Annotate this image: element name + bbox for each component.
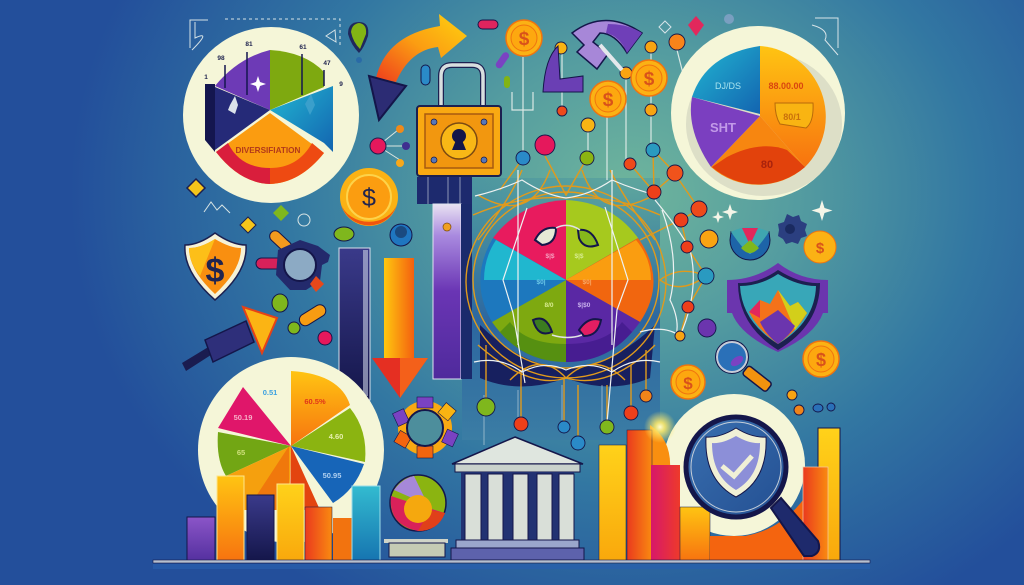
small gear — [778, 214, 807, 244]
icons right of web: $ — [816, 240, 825, 257]
cream circle behind large magnifier — [663, 394, 805, 536]
leaves — [535, 228, 556, 245]
center panel behind web — [462, 178, 660, 445]
panel: central pie in web — [480, 200, 654, 362]
green wedge — [270, 50, 324, 110]
panel: top left diversification pie — [183, 27, 359, 203]
gauge — [730, 232, 770, 260]
pie labels: $|$ — [545, 253, 555, 260]
icon: green pin — [348, 22, 368, 63]
panel: top left diversification pie: 81 — [245, 41, 253, 48]
icon: shield with mountains — [727, 263, 828, 352]
icon: globe pie on base — [384, 475, 448, 557]
baseline — [153, 560, 870, 569]
panel: top left diversification pie: 98 — [217, 55, 225, 62]
icon: coins right: $ — [816, 350, 826, 370]
navy wedge — [215, 87, 270, 150]
icon: gear — [393, 397, 458, 458]
blue wedge — [270, 86, 333, 152]
arrow: curved orange — [369, 14, 467, 120]
panel: top right pie — [671, 26, 845, 200]
bar: navy tall — [339, 248, 370, 400]
icon: coins top center — [506, 20, 667, 117]
icon: large magnifier with shield — [686, 417, 819, 556]
bar chart left — [187, 476, 380, 561]
panel: top left diversification pie: 47 — [323, 60, 331, 67]
panel: bottom left pie: 65 — [237, 448, 245, 457]
icon: coins top center: $ — [603, 90, 614, 111]
icon: gear with lens — [256, 224, 412, 345]
panel: bottom left pie: 0.51 — [263, 388, 277, 397]
icon: coins top center: $ — [644, 69, 655, 90]
web network — [466, 150, 706, 443]
icon: padlock — [417, 65, 501, 176]
icons right of web — [712, 200, 836, 263]
pie labels: $0| — [582, 279, 592, 286]
small network nodes — [378, 130, 406, 160]
icon: purple hammer — [543, 20, 642, 92]
pie segments — [480, 200, 654, 362]
arrow: down red orange — [372, 258, 428, 398]
panel: top right pie: SHT — [710, 120, 736, 135]
purple pillar — [417, 177, 472, 379]
pie labels: $|$0 — [578, 302, 591, 309]
bar chart right — [599, 411, 840, 561]
icon: coins right: $ — [683, 374, 693, 393]
icon: small magnifier — [716, 340, 772, 392]
icon: coins right — [671, 341, 839, 399]
panel: top right pie: 80/1 — [783, 112, 801, 122]
orange diversification wedge — [216, 113, 324, 184]
panel: bottom left pie: 50.95 — [323, 471, 341, 480]
capsules — [421, 20, 510, 88]
network nodes and stems — [512, 47, 705, 180]
frame corners top left — [190, 19, 340, 50]
pie labels: $0| — [536, 279, 546, 286]
pie labels: 8/0 — [544, 302, 554, 309]
panel: top left diversification pie: 9 — [339, 81, 343, 88]
purple wedge — [215, 50, 270, 110]
pie labels — [536, 253, 592, 309]
panel: top right pie: 88.00.00 — [768, 81, 804, 91]
pie labels: $|$ — [574, 253, 584, 260]
panel: top right pie: 80 — [761, 159, 773, 171]
panel: bottom left pie: 4.60 — [329, 432, 343, 441]
icon: shield with dollar: $ — [206, 252, 225, 290]
decor top right — [659, 14, 838, 55]
icon: coins top center: $ — [519, 29, 530, 50]
panel: bottom left pie — [198, 357, 384, 543]
label: diversification: DIVERSIFIATION — [236, 146, 301, 155]
panel: top left diversification pie: 1 — [204, 74, 208, 81]
icon: shield with dollar — [185, 233, 246, 300]
panel: top right pie: DJ/DS — [715, 81, 741, 91]
icon: pipe and triangle — [182, 307, 277, 371]
icon: coin left: $ — [362, 184, 376, 212]
panel: bottom left pie: 60.5% — [304, 397, 326, 406]
panel: top left diversification pie: 61 — [299, 44, 307, 51]
small decor icons left — [187, 179, 310, 233]
panel: bottom left pie: 50.19 — [234, 413, 252, 422]
icon: bank building — [451, 437, 584, 560]
icon: coin left — [340, 168, 398, 226]
